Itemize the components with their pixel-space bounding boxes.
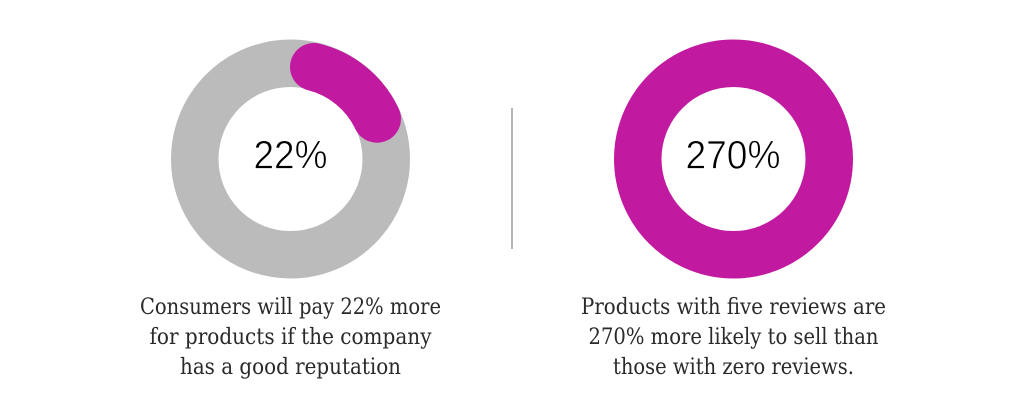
panel: reputation statistic (140, 63, 441, 380)
caption (140, 295, 441, 380)
donut chart: 270% (638, 63, 829, 255)
caption: Consumers will pay 22% more (140, 295, 441, 320)
donut value: 22% (254, 134, 328, 178)
caption: those with zero reviews. (613, 355, 854, 380)
caption: for products if the company (150, 325, 432, 350)
caption: Products with five reviews are (581, 295, 886, 320)
caption (581, 295, 886, 380)
vertical divider (511, 108, 513, 249)
panel: reviews statistic (581, 63, 886, 380)
donut value: 270% (686, 134, 780, 178)
caption: has a good reputation (180, 355, 401, 380)
caption: 270% more likely to sell than (588, 325, 878, 350)
donut chart: 22% (195, 63, 386, 255)
